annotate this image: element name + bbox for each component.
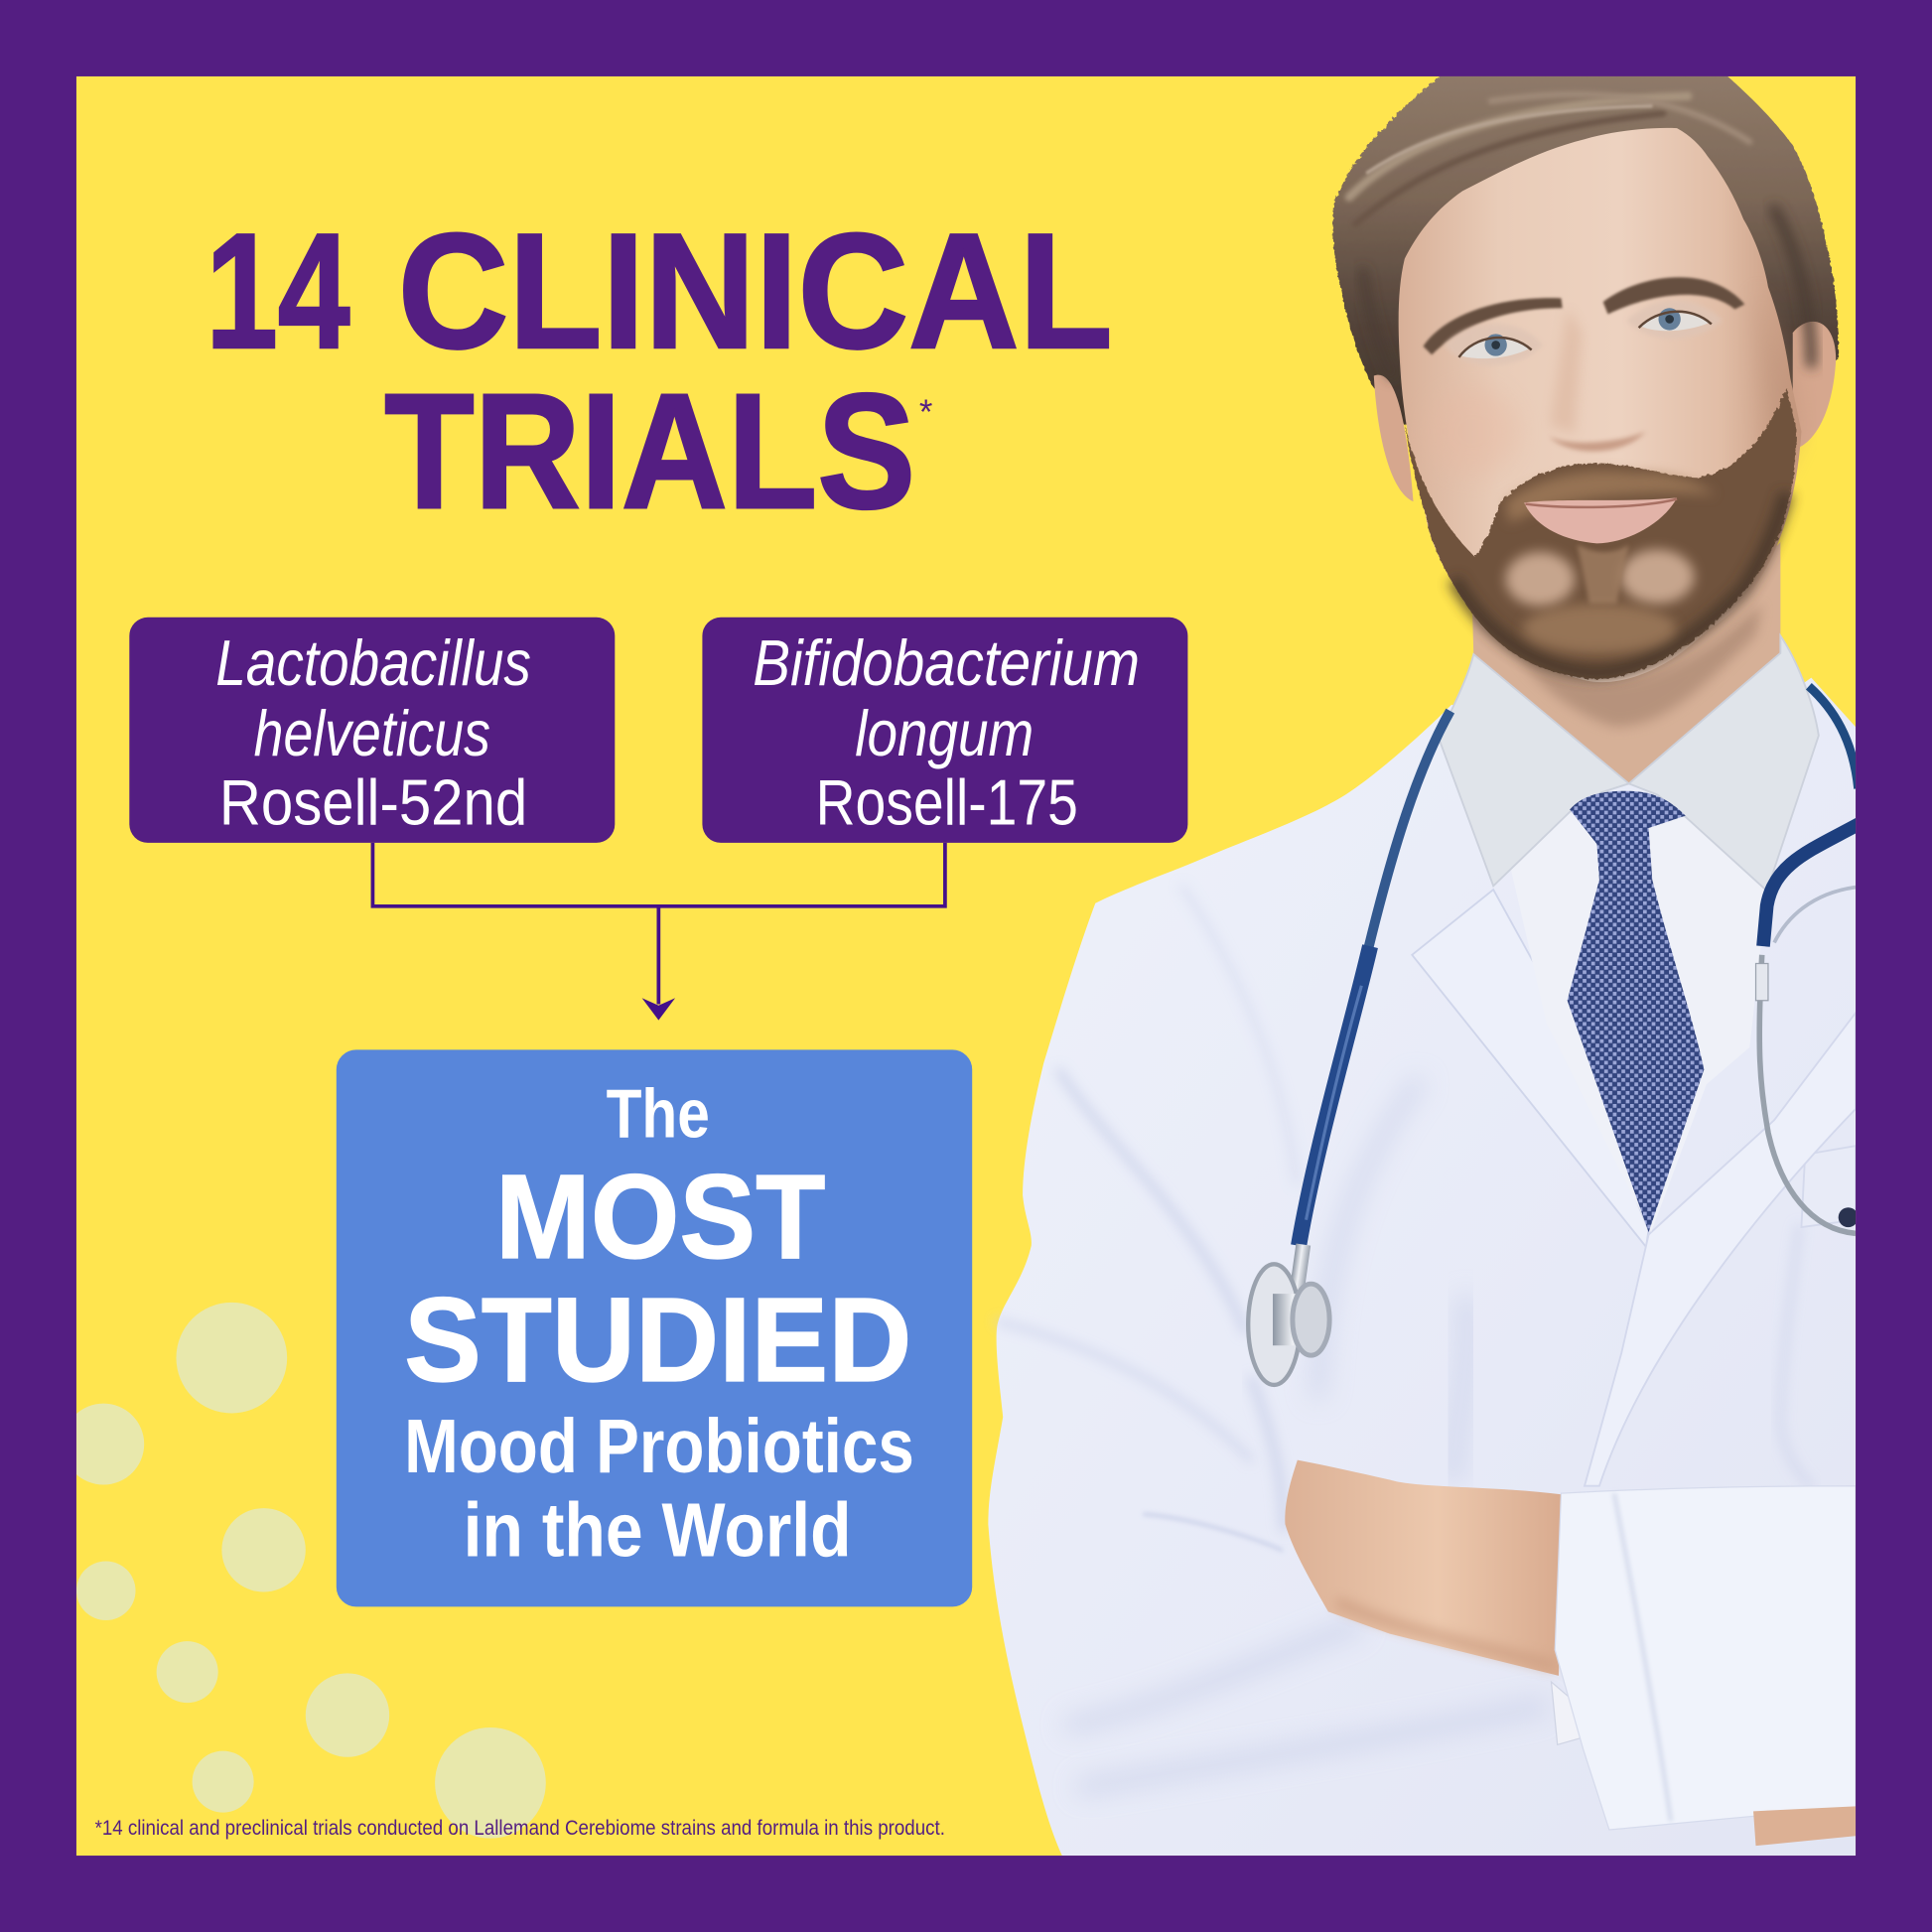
title: [206, 200, 1113, 542]
ears: [1374, 322, 1836, 501]
forearm shading: [1337, 1601, 1555, 1666]
stethoscope earpiece: [1839, 1207, 1859, 1227]
left lapel: [1412, 890, 1649, 1247]
decorative bubbles: [63, 1303, 546, 1839]
lab coat: [988, 678, 1856, 1856]
panel: Bifidobacterium strain: longum: [855, 698, 1034, 769]
soul patch: [1578, 545, 1629, 604]
panel: Lactobacillus strain: Lactobacillus: [215, 627, 531, 699]
shirt collar: [1440, 635, 1819, 891]
beard stubble: [1405, 388, 1796, 679]
neck shadow under beard: [1516, 604, 1762, 727]
right lapel: [1585, 1013, 1856, 1486]
shirt: [1531, 956, 1680, 1232]
arrow: connector to blue panel: [372, 843, 945, 1021]
panel: most studied: [337, 1049, 972, 1606]
cuff seam: [1614, 1493, 1671, 1821]
nose shadow: [1549, 431, 1646, 452]
panel: most studied: in the World: [464, 1487, 852, 1573]
eyebrows: [1423, 277, 1744, 354]
panel: most studied: Mood Probiotics: [404, 1404, 914, 1489]
neck: [1472, 542, 1780, 783]
title: 14: [206, 200, 349, 382]
title: TRIALS: [384, 359, 915, 542]
cheek blush: [1487, 409, 1507, 453]
crossed forearm: [1285, 1460, 1563, 1676]
face: [1399, 128, 1801, 682]
footnote: *14 clinical and preclinical trials conducted on Lallemand Cerebiome strains and formula in this product.: [95, 1815, 945, 1840]
title asterisk: *: [919, 394, 932, 432]
panel: Bifidobacterium strain: [702, 618, 1187, 843]
necktie: [1568, 791, 1704, 1232]
panel: Lactobacillus strain: helveticus: [254, 698, 490, 769]
title: CLINICAL: [398, 200, 1113, 382]
left eye: [1445, 324, 1543, 365]
panel: most studied: MOST: [495, 1150, 826, 1284]
stethoscope tubing: [1299, 686, 1861, 1246]
beard golden highlights: [1506, 471, 1716, 523]
panel: most studied: The: [607, 1075, 710, 1153]
doctor photo illustration: [988, 73, 1861, 1856]
hair strands: [1349, 94, 1811, 376]
right eye: [1626, 300, 1723, 339]
nose bridge shade: [1550, 308, 1583, 434]
stethoscope chestpiece: [1248, 1244, 1329, 1385]
coat fold shading: [998, 888, 1811, 1787]
mouth line: [1525, 499, 1677, 507]
panel: Lactobacillus strain: Rosell-52nd: [219, 766, 527, 838]
panel: most studied: STUDIED: [404, 1273, 911, 1407]
shirt cuff: [1551, 1681, 1580, 1745]
lower hand: [1753, 1806, 1856, 1846]
chin skin patch right: [1620, 550, 1694, 604]
beard dark outer edge: [1453, 492, 1787, 673]
rolled coat cuff: [1555, 1486, 1856, 1830]
panel: Lactobacillus strain: [129, 618, 615, 843]
panel: Bifidobacterium strain: Bifidobacterium: [753, 627, 1140, 699]
coat pocket: [1801, 1146, 1856, 1227]
stethoscope metal tube: [1759, 955, 1856, 1233]
lips: [1524, 497, 1677, 543]
hair mass: [1333, 73, 1839, 425]
chin skin patch left: [1506, 552, 1575, 607]
golden chin hair: [1523, 604, 1676, 653]
right face shade: [1779, 320, 1802, 451]
panel: Bifidobacterium strain: Rosell-175: [816, 766, 1078, 838]
